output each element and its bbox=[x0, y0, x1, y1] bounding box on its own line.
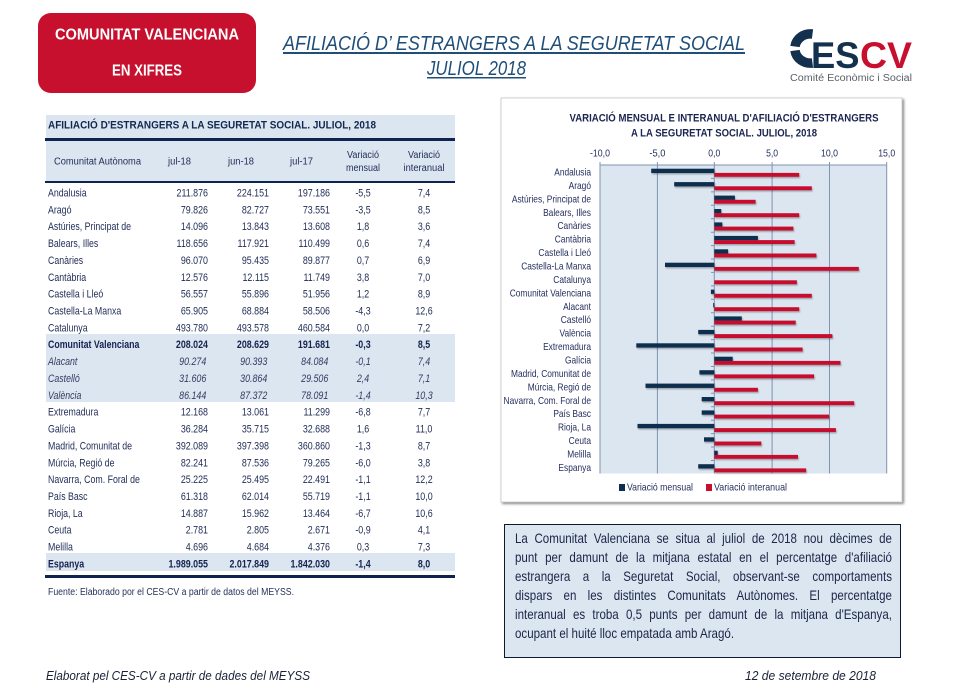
column: jul-18: 36.284 bbox=[181, 424, 209, 436]
badge: Comunitat Valenciana en xifres bbox=[38, 13, 256, 93]
column: jul-17: 78.091 bbox=[301, 390, 328, 402]
text box: commentary: La Comunitat Valenciana se situa al juliol de 2018 nou dècimes de bbox=[515, 530, 892, 546]
y axis labels: Balears, Illes bbox=[543, 207, 591, 218]
column: variació mensual: -5,5 bbox=[355, 188, 371, 200]
y axis labels: Galícia bbox=[565, 355, 592, 366]
chart legend: Variació interanual bbox=[714, 482, 787, 494]
column: variació interanual: 10,0 bbox=[415, 491, 433, 503]
column: variació mensual: 0,7 bbox=[357, 255, 369, 267]
y axis labels: Extremadura bbox=[543, 341, 592, 352]
table header: Comunitat Autònoma bbox=[54, 156, 141, 168]
column: jul-17: 360.860 bbox=[298, 441, 331, 453]
column: region names: Cantàbria bbox=[48, 272, 87, 284]
y axis labels: Castella-La Manxa bbox=[521, 261, 592, 272]
column: jul-18: 86.144 bbox=[179, 390, 207, 402]
column: region names: Galícia bbox=[48, 424, 76, 436]
column: jul-17: 84.084 bbox=[301, 356, 329, 368]
table header: jun-18 bbox=[227, 156, 254, 168]
column: jul-18: 96.070 bbox=[181, 255, 209, 267]
column: jul-17: 197.186 bbox=[298, 188, 330, 200]
column: jul-17: 191.681 bbox=[298, 340, 331, 351]
column: jun-18: 87.372 bbox=[240, 390, 268, 402]
column: variació mensual: 0,6 bbox=[357, 238, 369, 250]
column: jul-18: 61.318 bbox=[181, 491, 208, 503]
column: variació interanual: 12,2 bbox=[415, 474, 433, 486]
y axis labels: Melilla bbox=[567, 449, 592, 460]
column: region names: Alacant bbox=[47, 356, 78, 368]
table title band: AFILIACIÓ D'ESTRANGERS A LA SEGURETAT SOCIAL. JULIOL, 2018 bbox=[48, 118, 376, 132]
panel: bar chart bbox=[501, 98, 902, 502]
highlighted rows: Comunitat Valenciana bbox=[46, 334, 455, 402]
logo: CES CV: Comité Econòmic i Social bbox=[790, 73, 912, 84]
column: variació interanual: 8,7 bbox=[418, 441, 430, 453]
column: jul-17: 29.506 bbox=[300, 373, 329, 385]
column: jul-17: 51.956 bbox=[303, 289, 330, 301]
footer: source: Elaborat pel CES-CV a partir de dades del MEYSS bbox=[46, 668, 310, 683]
column: variació interanual: 8,0 bbox=[418, 559, 431, 571]
column: variació interanual: 7,4 bbox=[418, 238, 431, 250]
column: jun-18: 55.896 bbox=[242, 289, 269, 301]
table header bbox=[45, 141, 455, 183]
column: region names: Melilla bbox=[48, 542, 73, 554]
column: region names: Comunitat Valenciana bbox=[48, 339, 140, 351]
footer: date: 12 de setembre de 2018 bbox=[745, 668, 877, 683]
column: variació mensual: 1,8 bbox=[357, 222, 369, 233]
column: jun-18: 493.578 bbox=[237, 323, 269, 335]
y axis labels: Catalunya bbox=[553, 274, 592, 285]
column: variació mensual: 2,4 bbox=[356, 373, 370, 385]
column: variació interanual: 7,4 bbox=[418, 188, 431, 200]
table header: jul-18 bbox=[167, 156, 191, 168]
y axis labels: Navarra, Com. Foral de bbox=[504, 395, 591, 406]
column: jun-18: 2.805 bbox=[247, 525, 270, 537]
text box: commentary: punt per damunt de la mitjana estatal en el percentatge d'afiliació bbox=[515, 550, 892, 564]
logo: CES CV: CV bbox=[860, 35, 912, 76]
column: jun-18: 13.061 bbox=[242, 407, 269, 419]
column: variació mensual: 0,0 bbox=[357, 323, 370, 335]
title bbox=[282, 32, 745, 80]
column: jul-18: 392.089 bbox=[176, 441, 208, 453]
column: jul-17: 1.842.030 bbox=[290, 559, 331, 571]
column: region names: País Basc bbox=[48, 491, 88, 503]
column: variació mensual bbox=[355, 188, 371, 571]
column: variació interanual: 3,8 bbox=[418, 458, 430, 470]
column: jun-18: 35.715 bbox=[242, 424, 270, 436]
column: region names: Balears, Illes bbox=[48, 238, 98, 250]
x axis labels: -10,0 bbox=[590, 148, 610, 160]
column: variació mensual: -0,3 bbox=[355, 340, 371, 351]
title: AFILIACIÓ D’ ESTRANGERS A LA SEGURETAT SOCIAL bbox=[282, 32, 745, 55]
y axis labels: Comunitat Valenciana bbox=[510, 288, 592, 299]
column: variació mensual: -0,1 bbox=[355, 356, 371, 368]
column: jun-18: 15.962 bbox=[242, 508, 269, 520]
bars: variació mensual bbox=[636, 169, 758, 468]
table header: Variació bbox=[347, 150, 379, 161]
highlighted row: Espanya bbox=[46, 553, 455, 571]
y axis labels: Múrcia, Regió de bbox=[528, 382, 591, 393]
column: variació mensual: -1,3 bbox=[355, 441, 371, 453]
logo: CES CV: ES bbox=[811, 35, 860, 76]
column: jul-18: 31.606 bbox=[179, 373, 207, 385]
column: variació mensual: -4,3 bbox=[355, 306, 371, 318]
text box: commentary: estrangera a la Seguretat Social, observant-se comportaments bbox=[515, 568, 892, 584]
x axis labels: 5,0 bbox=[766, 148, 778, 160]
column: jul-18: 90.274 bbox=[179, 356, 207, 368]
chart legend: Variació mensual bbox=[627, 482, 693, 494]
column: variació interanual: 6,9 bbox=[418, 255, 430, 267]
x axis labels: 15,0 bbox=[878, 148, 896, 160]
column: variació mensual: -1,1 bbox=[355, 474, 371, 486]
x axis labels bbox=[590, 148, 896, 160]
column: region names bbox=[47, 188, 140, 571]
column: jul-17: 11.749 bbox=[303, 272, 330, 284]
column: variació interanual: 10,6 bbox=[415, 508, 433, 520]
column: region names: Catalunya bbox=[48, 323, 88, 335]
column: jul-17: 4.376 bbox=[308, 542, 330, 554]
column: jul-17: 79.265 bbox=[303, 458, 331, 470]
column: jun-18: 87.536 bbox=[242, 458, 269, 470]
column: jul-18: 65.905 bbox=[181, 306, 209, 318]
y axis labels: Espanya bbox=[558, 462, 592, 473]
column: variació mensual: 1,6 bbox=[357, 424, 369, 436]
column: variació interanual: 12,6 bbox=[415, 306, 433, 318]
column: jul-17: 460.584 bbox=[298, 323, 331, 335]
column: variació mensual: 3,8 bbox=[357, 272, 369, 284]
column: region names: Andalusia bbox=[48, 188, 87, 200]
chart legend bbox=[619, 482, 787, 494]
chart title: VARIACIÓ MENSUAL E INTERANUAL D'AFILIACIÓ D'ESTRANGERS bbox=[570, 112, 878, 124]
y axis labels: Rioja, La bbox=[558, 422, 592, 433]
column: jul-17: 58.506 bbox=[303, 306, 330, 318]
column: jul-18 bbox=[168, 188, 209, 571]
column: jul-18: 82.241 bbox=[181, 458, 208, 470]
column: jun-18: 82.727 bbox=[242, 205, 269, 217]
column: region names: Ceuta bbox=[48, 525, 72, 537]
column: jul-18: 25.225 bbox=[181, 474, 209, 486]
column: variació interanual: 7,1 bbox=[418, 373, 430, 385]
x axis labels: 10,0 bbox=[821, 148, 838, 160]
table header: mensual bbox=[346, 163, 380, 174]
table title band bbox=[46, 115, 455, 138]
column: variació interanual: 4,1 bbox=[418, 525, 430, 537]
column: variació interanual: 7,0 bbox=[418, 272, 431, 284]
column: jul-18: 56.557 bbox=[181, 289, 208, 301]
column: variació interanual: 7,3 bbox=[418, 542, 430, 554]
x axis labels: -5,0 bbox=[649, 148, 666, 160]
column: variació interanual: 7,2 bbox=[418, 323, 430, 335]
column: jun-18: 12.115 bbox=[242, 272, 270, 284]
column: jul-18: 12.168 bbox=[181, 407, 208, 419]
column: jun-18: 25.495 bbox=[242, 474, 270, 486]
column: region names: Extremadura bbox=[48, 407, 99, 419]
y axis labels: Andalusia bbox=[554, 167, 592, 178]
chart title bbox=[570, 112, 878, 140]
column: jul-18: 2.781 bbox=[186, 525, 208, 537]
column: variació mensual: 0,3 bbox=[357, 542, 369, 554]
column: variació interanual: 7,4 bbox=[418, 356, 431, 368]
column: jun-18: 224.151 bbox=[237, 188, 269, 200]
column: jun-18: 68.884 bbox=[242, 306, 270, 318]
column: variació interanual: 3,6 bbox=[418, 222, 430, 233]
column: jun-18: 397.398 bbox=[237, 441, 269, 453]
plot area bbox=[600, 165, 887, 474]
column: variació mensual: -6,7 bbox=[355, 508, 371, 520]
column: jul-17: 22.491 bbox=[303, 474, 330, 486]
column: jun-18: 2.017.849 bbox=[229, 559, 270, 571]
column: jun-18: 90.393 bbox=[240, 356, 268, 368]
column: variació mensual: -1,4 bbox=[355, 559, 371, 571]
y axis labels: Aragó bbox=[569, 180, 591, 191]
column: jul-18: 211.876 bbox=[177, 188, 208, 200]
column: jun-18 bbox=[229, 188, 270, 571]
y axis labels: Astúries, Principat de bbox=[512, 194, 591, 205]
y axis labels: Cantàbria bbox=[555, 234, 592, 245]
table header: Variació bbox=[408, 150, 440, 161]
y axis labels: Castella i Lleó bbox=[538, 247, 591, 258]
column: jul-17: 11.299 bbox=[303, 407, 330, 419]
column: variació interanual: 8,9 bbox=[418, 289, 430, 301]
column: region names: Aragó bbox=[48, 205, 71, 217]
text box: commentary: ocupant el huité lloc empatada amb Aragó. bbox=[515, 626, 734, 640]
y axis labels: País Basc bbox=[553, 408, 591, 419]
table: afiliació d'estrangers bbox=[45, 115, 455, 578]
column: variació interanual: 8,5 bbox=[418, 205, 431, 217]
column: region names: Múrcia, Regió de bbox=[48, 458, 114, 470]
badge: Comunitat Valenciana en xifres: COMUNITAT VALENCIANA bbox=[55, 26, 239, 44]
column: variació interanual: 11,0 bbox=[416, 424, 433, 436]
column: jul-17: 110.499 bbox=[299, 238, 330, 250]
x axis labels: 0,0 bbox=[708, 148, 721, 160]
text box: commentary: interanual es troba 0,5 punts per damunt de la mitjana d'Espanya, bbox=[515, 606, 892, 622]
column: variació mensual: -1,4 bbox=[355, 390, 371, 402]
column: region names: Rioja, La bbox=[48, 508, 83, 520]
column: jul-18: 208.024 bbox=[176, 340, 209, 351]
column: region names: Espanya bbox=[48, 559, 85, 571]
column: region names: Castella-La Manxa bbox=[48, 306, 122, 318]
column: jun-18: 208.629 bbox=[237, 340, 270, 351]
column: jul-17 bbox=[290, 188, 331, 571]
source note: Fuente: Elaborado por el CES-CV a partir de datos del MEYSS. bbox=[48, 587, 294, 598]
column: jul-18: 1.989.055 bbox=[168, 559, 209, 571]
column: jun-18: 117.921 bbox=[238, 238, 269, 250]
column: variació interanual: 8,5 bbox=[418, 340, 431, 351]
column: region names: Madrid, Comunitat de bbox=[48, 441, 132, 453]
column: jul-17: 13.608 bbox=[303, 222, 330, 233]
column: jul-18: 14.096 bbox=[181, 222, 208, 233]
y axis labels: Ceuta bbox=[569, 435, 592, 446]
column: region names: Castella i Lleó bbox=[48, 289, 103, 301]
y axis labels: Madrid, Comunitat de bbox=[511, 368, 591, 379]
column: variació interanual: 10,3 bbox=[415, 390, 433, 402]
column: variació mensual: -0,9 bbox=[355, 525, 371, 537]
column: region names: Astúries, Principat de bbox=[48, 221, 131, 233]
column: jul-17: 2.671 bbox=[308, 525, 330, 537]
column: variació mensual: 1,2 bbox=[357, 289, 369, 301]
table header: interanual bbox=[404, 163, 444, 174]
logo: CES CV bbox=[790, 34, 912, 84]
y axis labels: Alacant bbox=[563, 301, 591, 312]
column: jun-18: 30.864 bbox=[240, 373, 268, 385]
bars: variació interanual bbox=[714, 173, 859, 472]
column: jul-17: 32.688 bbox=[303, 424, 330, 436]
column: region names: Canàries bbox=[48, 255, 83, 267]
column: jun-18: 13.843 bbox=[242, 222, 269, 233]
column: region names: Castelló bbox=[48, 373, 80, 385]
y axis labels: València bbox=[560, 328, 592, 339]
text box: commentary bbox=[504, 524, 901, 658]
column: jul-18: 79.826 bbox=[181, 205, 208, 217]
column: variació mensual: -3,5 bbox=[355, 205, 371, 217]
y axis labels: Canàries bbox=[557, 220, 591, 231]
column: jul-18: 4.696 bbox=[186, 542, 208, 554]
column: jun-18: 4.684 bbox=[247, 542, 270, 554]
column: region names: València bbox=[48, 390, 82, 402]
column: jul-18: 118.656 bbox=[177, 238, 208, 250]
table header: jul-17 bbox=[289, 156, 313, 168]
column: jun-18: 62.014 bbox=[242, 491, 270, 503]
column: region names: Navarra, Com. Foral de bbox=[48, 474, 140, 486]
y axis labels bbox=[504, 167, 592, 473]
column: variació mensual: -6,0 bbox=[355, 458, 371, 470]
column: variació interanual: 7,7 bbox=[418, 407, 430, 419]
title: JULIOL 2018 bbox=[426, 58, 526, 80]
chart title: A LA SEGURETAT SOCIAL. JULIOL, 2018 bbox=[631, 128, 817, 140]
y axis labels: Castelló bbox=[561, 314, 591, 325]
column: jul-17: 13.464 bbox=[303, 508, 331, 520]
column: jul-18: 14.887 bbox=[181, 508, 208, 520]
column: jul-17: 89.877 bbox=[303, 255, 330, 267]
column: variació mensual: -6,8 bbox=[355, 407, 371, 419]
column: jul-18: 493.780 bbox=[176, 323, 209, 335]
column: variació mensual: -1,1 bbox=[355, 491, 371, 503]
column: jul-17: 73.551 bbox=[303, 205, 330, 217]
text box: commentary: dispars en les distintes Comunitats Autònomes. El percentatge bbox=[515, 588, 892, 602]
column: jul-17: 55.719 bbox=[303, 491, 330, 503]
column: jun-18: 95.435 bbox=[242, 255, 270, 267]
badge: Comunitat Valenciana en xifres: EN XIFRES bbox=[112, 62, 182, 80]
column: variació interanual bbox=[415, 188, 433, 571]
column: jul-18: 12.576 bbox=[181, 272, 208, 284]
